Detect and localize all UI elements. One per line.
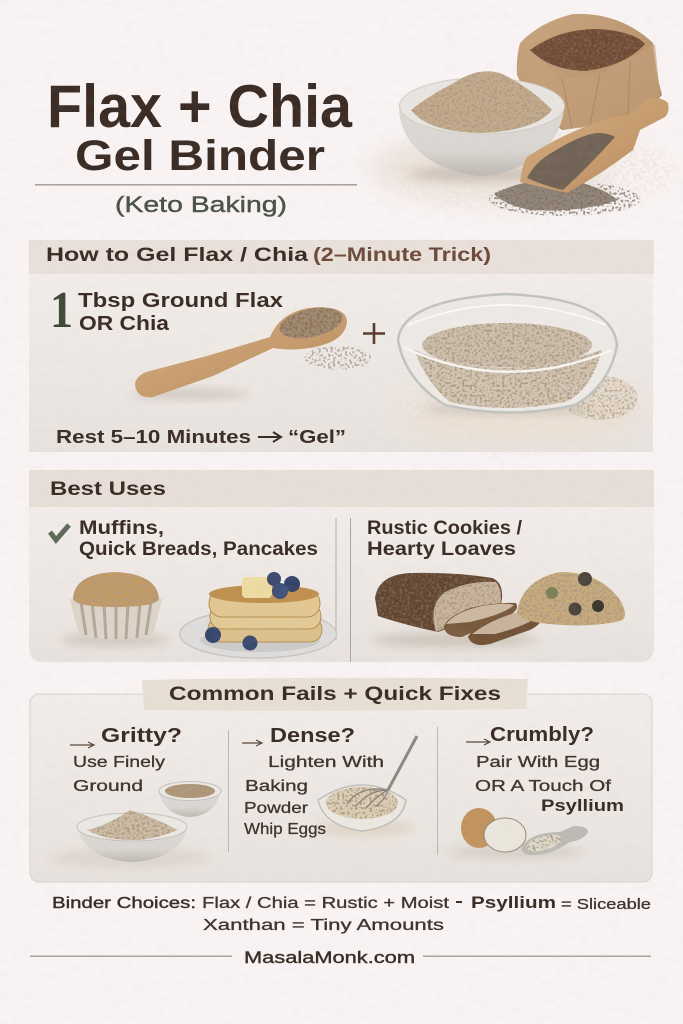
- icon: muffin: [60, 572, 170, 646]
- banner text: Common Fails + Quick Fixes: [169, 684, 501, 705]
- fix text: Baking: [245, 778, 308, 795]
- title: [35, 73, 357, 186]
- panel: common fails and quick fixes: [30, 678, 652, 882]
- panel body: [29, 505, 654, 662]
- column: dense: [242, 725, 417, 838]
- panel: how to gel: [29, 240, 654, 452]
- icon: check mark: [50, 525, 69, 540]
- header bar: [29, 240, 654, 274]
- fix text: [73, 754, 165, 795]
- amount text: Tbsp Ground Flax: [78, 290, 283, 312]
- fix text: Powder: [244, 800, 309, 817]
- binder choices line one: Flax / Chia = Rustic + Moist: [202, 895, 450, 912]
- use list two: Hearty Loaves: [367, 539, 516, 560]
- numeral 1: 1: [50, 282, 73, 339]
- fix text: Ground: [73, 778, 143, 795]
- column: gritty: [50, 725, 221, 868]
- icon: chocolate chip cookie: [517, 572, 625, 625]
- heading: dense: [242, 725, 355, 747]
- heading: crumbly: Crumbly?: [490, 724, 594, 746]
- wooden scoop: [520, 98, 669, 193]
- use list two: [367, 518, 523, 560]
- icon: eggs and psyllium scoop: [445, 808, 588, 859]
- fix text: Use Finely: [73, 754, 165, 771]
- amount text: OR Chia: [79, 313, 170, 335]
- binder choices line one: Psyllium: [471, 893, 556, 912]
- fix text: Whip Eggs: [244, 821, 326, 838]
- paper bag: [517, 14, 662, 130]
- heading: dense: Dense?: [270, 725, 355, 747]
- header text: Best Uses: [50, 479, 166, 500]
- heading: gritty: [70, 725, 182, 748]
- rest instruction: Rest 5–10 Minutes: [56, 427, 251, 447]
- hero illustration: flax, chia, bag and scoop: [370, 14, 680, 216]
- fix text: Pair With Egg: [476, 754, 600, 771]
- binder choices line one: Binder Choices:: [52, 895, 196, 912]
- panel body: [30, 694, 652, 882]
- use list one: Muffins,: [79, 518, 164, 539]
- plus sign: [363, 323, 385, 344]
- icon: bowls of ground seed: [50, 782, 221, 868]
- header accent text: (2–Minute Trick): [313, 245, 491, 266]
- fix text: [244, 754, 384, 838]
- icon: wooden spoon with ground seeds: [130, 303, 372, 399]
- footer: MasalaMonk.com: [244, 948, 415, 967]
- binder choices line one: = Sliceable: [561, 896, 651, 913]
- flax bowl: [399, 71, 564, 181]
- title: Gel Binder: [75, 132, 325, 180]
- icon: sliced seeded loaf: [370, 573, 542, 647]
- panel: best uses: [29, 470, 654, 662]
- icon: whisk in bowl: [315, 736, 417, 836]
- chia spill: [489, 182, 641, 216]
- title: Flax + Chia: [47, 73, 353, 140]
- flour spill: [392, 368, 648, 448]
- use list two: Rustic Cookies /: [367, 518, 523, 539]
- use list one: [79, 518, 318, 560]
- use list one: Quick Breads, Pancakes: [79, 539, 318, 560]
- fix text: Psyllium: [541, 796, 624, 815]
- fix text: [475, 754, 624, 815]
- fix text: Lighten With: [268, 754, 384, 771]
- header text: How to Gel Flax / Chia: [46, 245, 309, 266]
- rest instruction: “Gel”: [288, 427, 346, 447]
- panel body: [29, 270, 653, 452]
- rest instruction: [56, 427, 346, 447]
- binder choices line two: Xanthan = Tiny Amounts: [203, 917, 444, 934]
- icon: pancake stack with blueberries: [180, 572, 336, 658]
- column: crumbly: [445, 724, 624, 859]
- binder choices line one: [52, 893, 651, 913]
- amount text: [78, 290, 283, 335]
- fix text: OR A Touch Of: [475, 778, 612, 795]
- subtitle: (Keto Baking): [115, 192, 287, 217]
- header bar: [29, 470, 654, 507]
- icon: glass bowl with gel: [398, 294, 617, 414]
- banner: [142, 678, 528, 711]
- heading: gritty: Gritty?: [101, 725, 182, 747]
